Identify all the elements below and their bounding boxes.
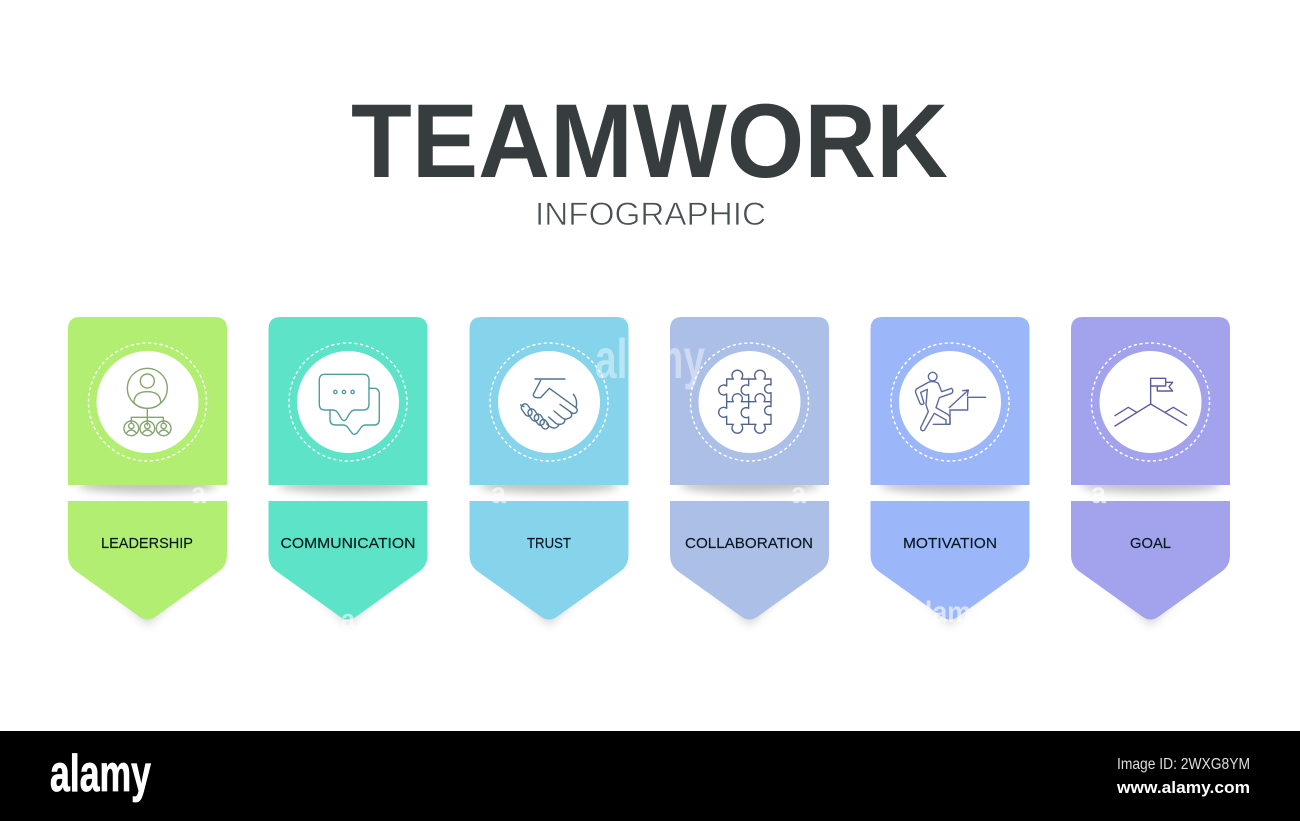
motivation label: MOTIVATION	[903, 536, 997, 552]
goal arrow tag	[1071, 501, 1230, 620]
communication arrow tag	[268, 501, 428, 620]
panel: collaboration	[670, 317, 829, 625]
watermark traces: alamy	[595, 327, 705, 390]
watermark traces: a	[791, 477, 806, 510]
panel: motivation	[870, 317, 1030, 625]
motivation top card	[870, 317, 1030, 485]
communication white circle	[297, 351, 399, 453]
communication top card	[268, 317, 428, 485]
image id: Image ID: 2WXG8YM	[1117, 756, 1250, 773]
leadership white circle	[96, 351, 198, 453]
watermark traces	[191, 327, 1106, 634]
goal white circle	[1100, 351, 1202, 453]
collaboration top card	[670, 317, 829, 485]
collaboration label: COLLABORATION	[685, 536, 813, 552]
icon: person climbing stairs	[916, 372, 986, 431]
website: www.alamy.com	[1116, 778, 1250, 797]
icon: puzzle pieces	[719, 370, 771, 433]
trust arrow tag	[470, 501, 628, 620]
trust label: TRUST	[527, 536, 571, 552]
footer bar	[0, 731, 1300, 821]
goal top card	[1071, 317, 1230, 485]
leadership top card	[68, 317, 227, 485]
leadership arrow tag	[68, 501, 227, 620]
watermark traces: a	[491, 477, 506, 510]
icon: speech bubbles	[319, 374, 379, 434]
title: TEAMWORK	[351, 83, 948, 200]
icon: org chart person	[124, 368, 171, 436]
motivation arrow tag	[870, 501, 1030, 620]
icon: handshake	[520, 379, 577, 430]
icon: flag on mountain	[1115, 378, 1187, 426]
collaboration white circle	[698, 351, 800, 453]
panel: communication	[268, 317, 428, 625]
communication label: COMMUNICATION	[280, 536, 416, 552]
collaboration arrow tag	[670, 501, 829, 620]
panel: leadership	[68, 317, 227, 625]
motivation white circle	[899, 351, 1001, 453]
goal label: GOAL	[1130, 536, 1171, 552]
trust white circle	[498, 351, 600, 453]
watermark traces: a	[191, 477, 206, 510]
watermark traces: a	[341, 604, 356, 634]
subtitle: INFOGRAPHIC	[535, 196, 766, 232]
watermark traces: alamy	[910, 596, 986, 629]
panel: goal	[1071, 317, 1230, 625]
trust top card	[470, 317, 628, 485]
panel: trust	[470, 317, 628, 625]
watermark traces: a	[1091, 477, 1106, 510]
leadership label: LEADERSHIP	[101, 536, 193, 552]
footer logo: alamy	[50, 745, 151, 803]
